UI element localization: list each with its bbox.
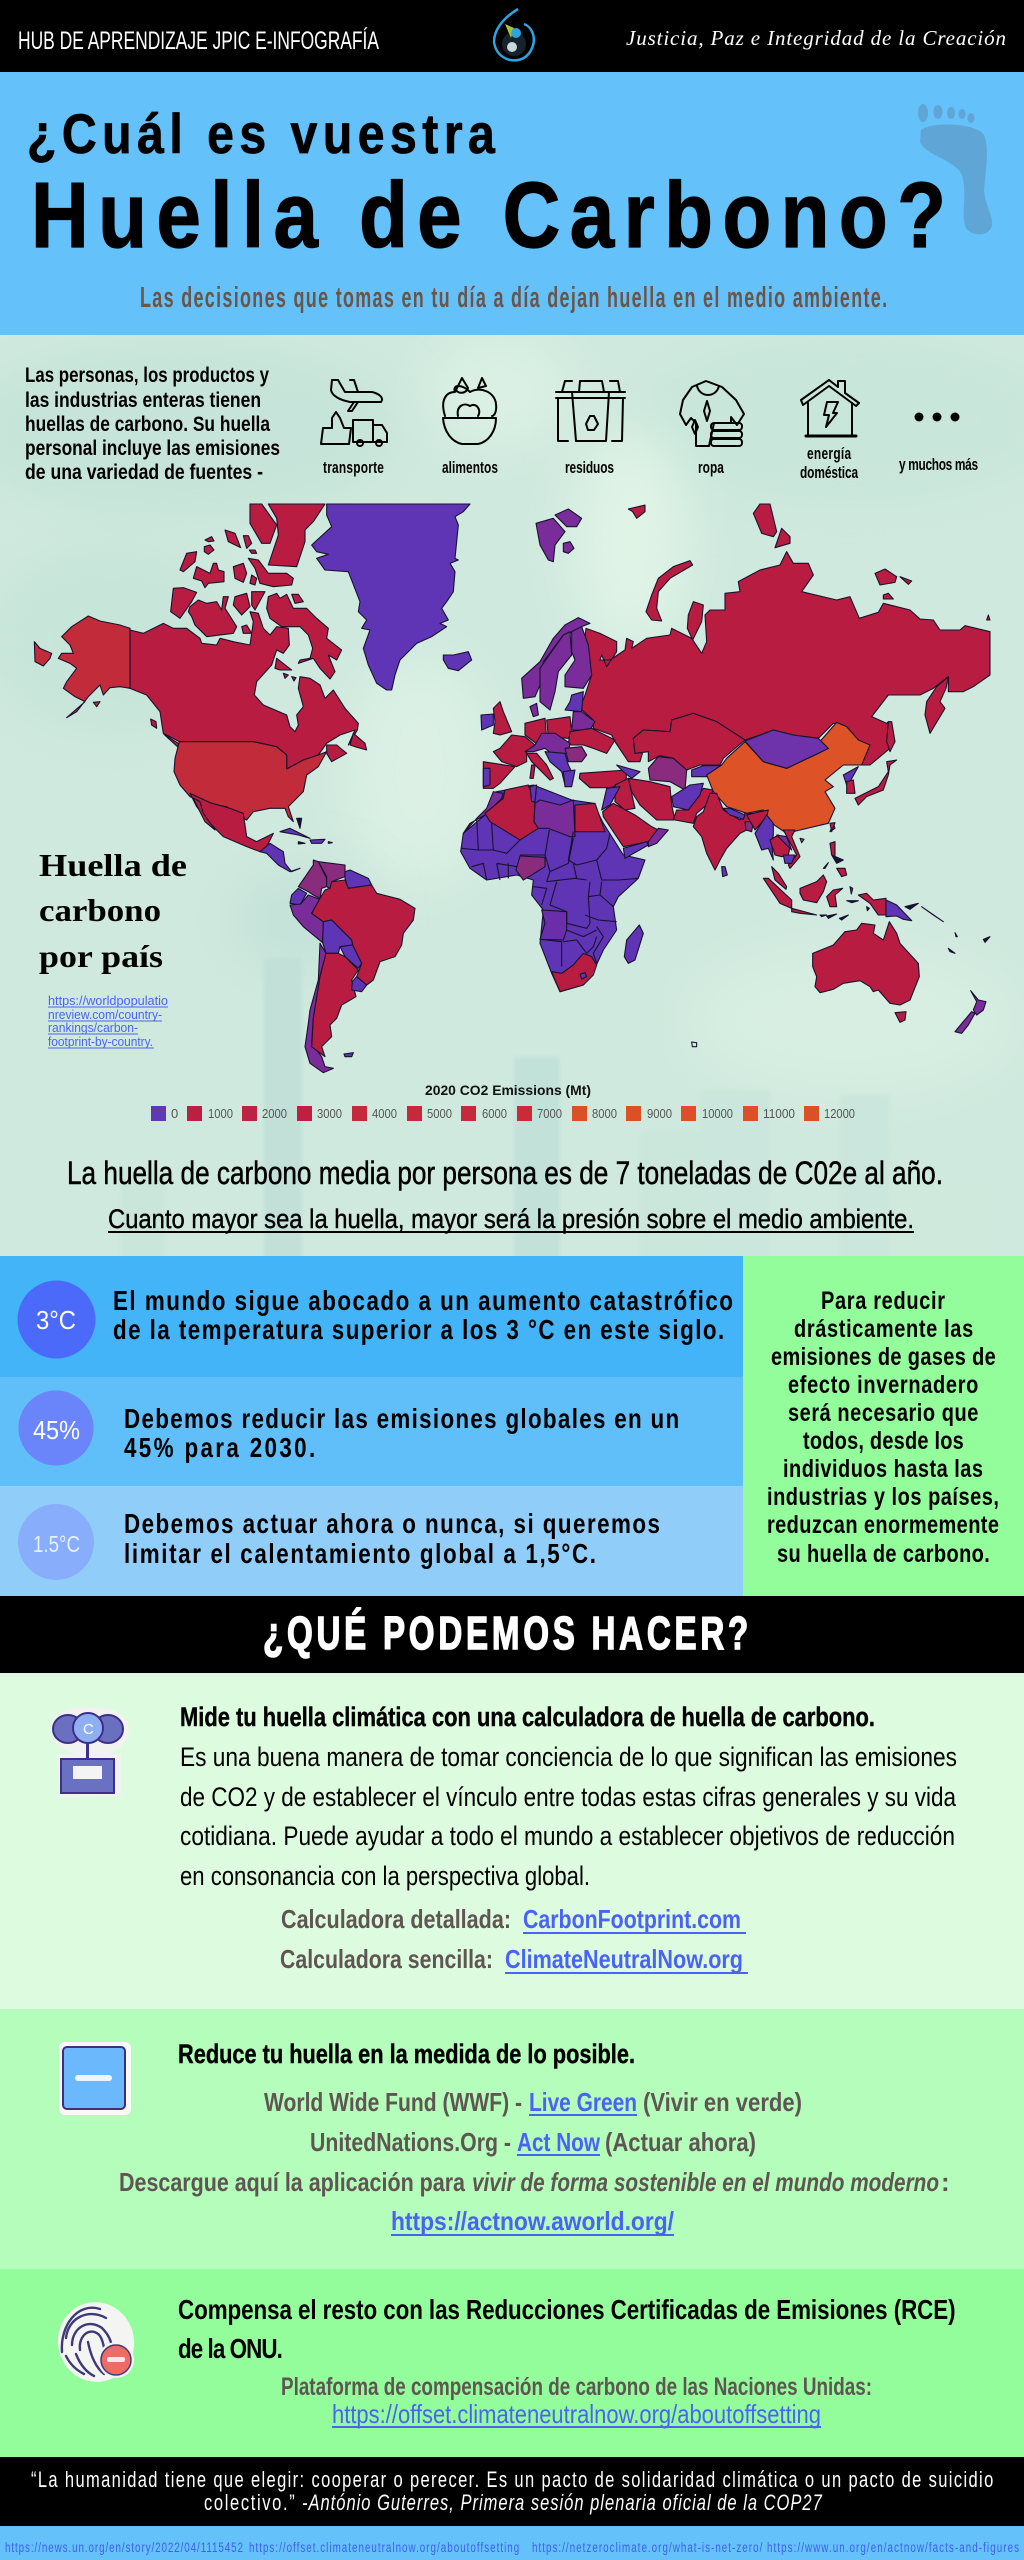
map heading: carbono	[39, 892, 161, 928]
icon: minus button	[59, 2042, 131, 2115]
panel: stat 1.5°C: Debemos actuar ahora o nunca, si queremos	[124, 1509, 660, 1540]
panel: quote	[0, 2457, 1024, 2526]
panel: sources	[0, 2526, 1024, 2560]
icon: logo	[494, 9, 534, 60]
North America and Greenland	[34, 504, 472, 822]
icon labels: y muchos más	[899, 456, 978, 475]
Latin America and Africa	[190, 785, 668, 1073]
map legend: 9000	[647, 1106, 672, 1121]
body text	[180, 1742, 957, 1891]
app link: https://actnow.aworld.org/	[391, 2206, 674, 2236]
intro text: las industrias enteras tienen	[25, 389, 261, 412]
map heading: por país	[39, 938, 163, 974]
map legend: 10000	[702, 1106, 733, 1121]
icon labels: energía	[807, 445, 852, 464]
panel: sources: https://news.un.org/en/story/2022/04/1115452	[5, 2539, 243, 2555]
panel heading: Compensa el resto con las Reducciones Certificadas de Emisiones (RCE)	[178, 2295, 956, 2326]
section heading bar	[0, 1596, 1024, 1673]
icon labels: ropa	[698, 459, 725, 478]
icon labels: alimentos	[442, 459, 498, 478]
panel: measure	[0, 1673, 1024, 2009]
panel: sources: https://www.un.org/en/actnow/facts-and-figures	[767, 2539, 1019, 2555]
map legend: 11000	[763, 1106, 795, 1121]
panel: stat 1.5°C: limitar el calentamiento global a 1,5°C.	[124, 1539, 596, 1570]
intro text: personal incluye las emisiones	[25, 437, 280, 460]
offset link: https://offset.climateneutralnow.org/aboutoffsetting	[332, 2399, 821, 2429]
icon labels: transporte	[323, 459, 384, 478]
United Nations line: UnitedNations.Org -	[310, 2127, 511, 2157]
subtitle: Las decisiones que tomas en tu día a día dejan huella en el medio ambiente.	[140, 282, 887, 314]
calculator links: CarbonFootprint.com	[523, 1904, 741, 1934]
header bar	[0, 0, 1024, 72]
map legend: 2000	[262, 1106, 287, 1121]
map legend: 2020 CO2 Emissions (Mt)	[425, 1082, 591, 1098]
pressure statement: Cuanto mayor sea la huella, mayor será la presión sobre el medio ambiente.	[108, 1204, 914, 1234]
United Nations line: Act Now	[517, 2127, 601, 2157]
panel heading: Mide tu huella climática con una calculadora de huella de carbono.	[180, 1702, 875, 1732]
panel heading	[178, 2295, 956, 2365]
calculator links: Calculadora sencilla:	[280, 1944, 493, 1974]
panel: stat 45%: 45%	[33, 1415, 80, 1445]
icon: dots	[914, 412, 960, 422]
body text: en consonancia con la perspectiva global.	[180, 1861, 590, 1891]
map heading	[39, 847, 187, 974]
app line	[119, 2167, 950, 2197]
world map of CO2 emissions	[34, 504, 990, 1073]
panel: reduction callout: drásticamente las	[794, 1315, 973, 1343]
panel: reduction callout: Para reducir	[821, 1287, 945, 1315]
panel: quote: colectivo.”	[204, 2491, 295, 2516]
header right text: Justicia, Paz e Integridad de la Creación	[626, 26, 1006, 50]
panel: reduction callout: será necesario que	[788, 1399, 978, 1427]
intro text: huellas de carbono. Su huella	[25, 413, 270, 436]
panel: stat 3°C: de la temperatura superior a los 3 °C en este siglo.	[113, 1315, 724, 1346]
map source link	[48, 993, 168, 1049]
icon: food bowl	[443, 378, 496, 444]
panel: reduction callout: individuos hasta las	[783, 1455, 983, 1483]
panel: stat 3°C: 3°C	[36, 1305, 76, 1335]
map legend: 8000	[592, 1106, 617, 1121]
icon: carbon calculator: C	[83, 1721, 94, 1738]
map legend: 0	[171, 1106, 178, 1121]
icon labels: doméstica	[800, 464, 859, 483]
panel: reduction callout: su huella de carbono.	[777, 1540, 990, 1568]
WWF line: (Vivir en verde)	[643, 2087, 802, 2117]
icon: home energy	[801, 380, 859, 436]
WWF line	[264, 2087, 802, 2117]
WWF line: Live Green	[529, 2087, 637, 2117]
calculator links	[280, 1904, 748, 1974]
map legend: 7000	[537, 1106, 562, 1121]
icon: fingerprint with minus	[51, 2295, 141, 2389]
panel: stat 45%: Debemos reducir las emisiones globales en un	[124, 1404, 679, 1435]
map source link: https://worldpopulatio	[48, 993, 168, 1008]
panel: reduction callout: industrias y los países,	[767, 1483, 999, 1511]
United Nations line: (Actuar ahora)	[605, 2127, 756, 2157]
panel: stat 3°C	[0, 1256, 743, 1377]
map legend	[151, 1082, 855, 1121]
panel: stat 1.5°C: 1.5°C	[33, 1531, 80, 1557]
panel: stat 45%: 45% para 2030.	[124, 1433, 315, 1464]
panel: title banner	[0, 72, 1024, 335]
panel: stat 1.5°C	[0, 1486, 743, 1596]
calculator links: ClimateNeutralNow.org	[505, 1944, 743, 1974]
title line 2: Huella de Carbono?	[31, 163, 946, 267]
panel: sources: https://offset.climateneutralnow.org/aboutoffsetting	[249, 2539, 519, 2555]
icon labels: residuos	[565, 459, 614, 478]
panel: reduction callout: reduzcan enormemente	[767, 1511, 999, 1539]
calculator links: Calculadora detallada:	[281, 1904, 511, 1934]
app line: Descargue aquí la aplicación para	[119, 2167, 465, 2197]
panel: quote: -António Guterres, Primera sesión plenaria oficial de la COP27	[302, 2491, 823, 2516]
panel heading: Reduce tu huella en la medida de lo posible.	[178, 2039, 635, 2069]
panel: reduction callout	[743, 1256, 1024, 1596]
South Asia and Oceania	[692, 793, 990, 1047]
icon: carbon calculator	[51, 1707, 129, 1798]
icon: transport	[321, 380, 387, 446]
panel: stat 45%	[0, 1377, 743, 1486]
panel: reduction callout: efecto invernadero	[788, 1371, 978, 1399]
panel: background with clouds and factory	[0, 330, 1024, 1260]
header left text: HUB DE APRENDIZAJE JPIC E-INFOGRAFÍA	[18, 26, 379, 55]
panel: reduce	[0, 2009, 1024, 2269]
Europe and Asia	[481, 504, 990, 833]
app line: :	[941, 2167, 950, 2197]
map legend: 5000	[427, 1106, 452, 1121]
intro text	[25, 364, 280, 484]
United Nations line	[310, 2127, 756, 2157]
panel: reduction callout: emisiones de gases de	[771, 1343, 996, 1371]
map source link: footprint-by-country.	[48, 1034, 153, 1049]
map heading: Huella de	[39, 847, 187, 883]
icon: clothes	[680, 381, 744, 446]
map legend: 12000	[824, 1106, 855, 1121]
panel: reduction callout: todos, desde los	[803, 1427, 964, 1455]
panel heading: de la ONU.	[178, 2334, 283, 2365]
panel: sources: https://netzeroclimate.org/what-is-net-zero/	[532, 2539, 763, 2555]
map legend: 4000	[372, 1106, 397, 1121]
section heading bar: ¿QUÉ PODEMOS HACER?	[263, 1608, 748, 1659]
icon labels	[323, 445, 978, 483]
map source link: nreview.com/country-	[48, 1007, 162, 1022]
map legend: 6000	[482, 1106, 507, 1121]
map legend: 1000	[208, 1106, 233, 1121]
panel: stat 3°C: El mundo sigue abocado a un aumento catastrófico	[113, 1286, 733, 1317]
WWF line: World Wide Fund (WWF) -	[264, 2087, 522, 2117]
icon: waste bins	[556, 381, 625, 441]
panel: quote: “La humanidad tiene que elegir: cooperar o perecer. Es un pacto de solidaridad climática o un pacto de suicidio	[31, 2468, 993, 2493]
map legend: 3000	[317, 1106, 342, 1121]
intro text: de una variedad de fuentes -	[25, 461, 263, 484]
icon: footprint	[918, 104, 992, 234]
intro text: Las personas, los productos y	[25, 364, 269, 387]
title line 1: ¿Cuál es vuestra	[27, 104, 496, 166]
map source link: rankings/carbon-	[48, 1020, 138, 1035]
panel: compensate	[0, 2269, 1024, 2457]
